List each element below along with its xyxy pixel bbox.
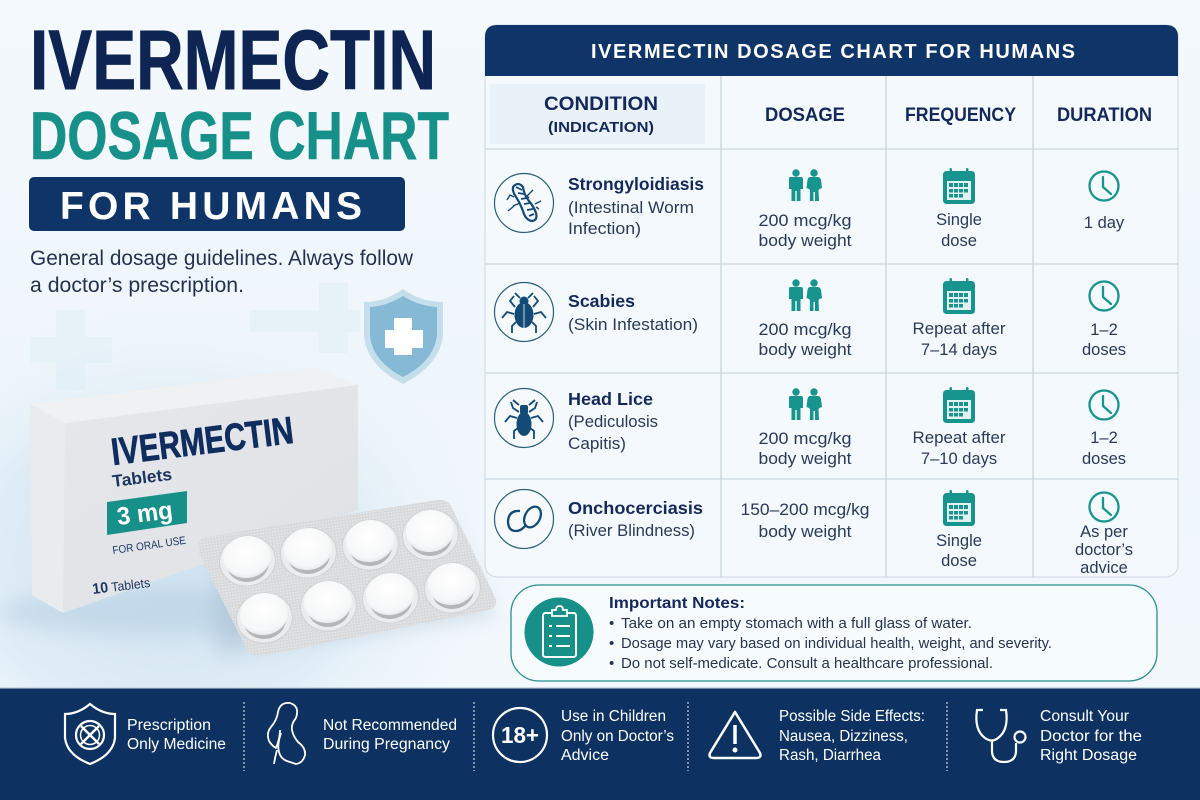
label: Nausea, Dizziness, [779,728,908,745]
condition note: Infection) [568,219,641,238]
frequency [936,490,982,570]
condition note: (Pediculosis [568,412,658,431]
dosage [758,388,852,468]
label [561,708,674,764]
duration [1082,282,1126,359]
label [127,717,226,753]
table header: condition [544,94,658,136]
notes list: • [609,635,614,652]
duration: doctor’s [1075,541,1133,559]
duration: As per [1080,523,1128,541]
duration: advice [1080,559,1128,577]
row: head lice [494,387,1126,468]
footer item: side effects [710,708,925,764]
frequency: dose [941,552,977,570]
label: Only on Doctor’s [561,728,674,745]
title banner: For Humans: FOR HUMANS [60,185,362,228]
duration: 1–2 [1090,321,1118,339]
icon: mite [494,282,554,342]
table header: condition: (INDICATION) [548,120,654,136]
duration: 1 day [1084,214,1125,232]
dosage: 200 mcg/kg [758,211,852,230]
notes list: Do not self-medicate. Consult a healthcare professional. [621,655,993,672]
label: Advice [561,747,609,764]
frequency: 7–10 days [921,450,997,468]
box label: 3 mg [107,491,187,535]
icon: pregnant woman [268,703,305,764]
dosage: 200 mcg/kg [758,429,852,448]
icon: worm [494,174,554,232]
notes heading: Important Notes: [609,595,745,612]
title: Dosage Chart: DOSAGE CHART [30,98,449,174]
label: Rash, Diarrhea [779,747,881,764]
label: During Pregnancy [323,736,450,753]
dosage: 200 mcg/kg [758,320,852,339]
duration [1082,390,1126,468]
icon: medical shield [364,289,443,384]
label: Right Dosage [1040,747,1137,764]
label: Consult Your [1040,708,1129,725]
condition note: (Intestinal Worm [568,198,694,217]
title banner: For Humans [29,177,405,231]
condition note: (River Blindness) [568,521,695,540]
condition name: Head Lice [568,389,653,409]
title block [29,13,449,231]
footer item: children [493,708,674,764]
frequency: dose [941,232,977,250]
frequency: Single [936,532,982,550]
dosage: 150–200 mcg/kg [740,500,870,519]
icon: 18 plus [493,708,547,762]
condition note: (Skin Infestation) [568,315,698,334]
notes list: Take on an empty stomach with a full glass of water. [621,615,972,632]
footer band [0,687,1200,800]
duration: 1–2 [1090,429,1118,447]
dosage: body weight [758,340,852,359]
icon: stethoscope [976,710,1026,762]
duration: doses [1082,450,1126,468]
label: Only Medicine [127,736,226,753]
footer item: pregnancy [268,703,457,764]
notes list: • [609,655,614,672]
notes list [609,615,1052,672]
medicine box [0,368,358,636]
dosage [758,279,852,359]
frequency: 7–14 days [921,341,997,359]
label: Use in Children [561,708,666,725]
row: strongyloidiasis [494,168,1125,250]
table header: condition: CONDITION [544,94,658,115]
icon: river worm loop [494,490,554,548]
blister pack [198,500,496,656]
box label: 10 tablets: 10 Tablets [91,574,152,598]
table banner: IVERMECTIN DOSAGE CHART FOR HUMANS [591,41,1075,63]
table banner [485,25,1178,76]
tablets [216,506,484,647]
row: scabies [494,278,1126,359]
dosage [758,169,852,250]
icon: clipboard [524,598,594,666]
box label: Tablets: Tablets [111,465,173,491]
label [323,717,457,753]
frequency [912,278,1006,359]
condition note: Capitis) [568,434,626,453]
label: Not Recommended [323,717,457,734]
duration [1084,172,1125,232]
icon: 18 plus: 18+ [501,722,539,748]
dosage: body weight [758,231,852,250]
box label: Ivermectin: IVERMECTIN [109,410,296,474]
notes list: Dosage may vary based on individual health, weight, and severity. [621,635,1052,652]
frequency [912,387,1006,468]
label: Prescription [127,717,211,734]
icon: warning triangle [710,712,760,758]
notes list: • [609,615,614,632]
footer item: prescription only [65,704,226,764]
icon: louse [494,388,554,448]
condition note [568,412,658,453]
table header: frequency: FREQUENCY [905,105,1016,126]
footer item: consult doctor [976,708,1142,764]
subtitle: General dosage guidelines. Always follow [30,246,413,270]
dosage [740,500,870,541]
icon: shield prohibition [65,704,115,764]
table header: dosage: DOSAGE [765,105,845,126]
frequency: Repeat after [912,320,1006,338]
condition name: Onchocerciasis [568,498,703,518]
frequency: Single [936,211,982,229]
title: Ivermectin: IVERMECTIN [30,13,436,107]
frequency: Repeat after [912,429,1006,447]
condition name: Scabies [568,291,635,311]
panel: important notes [511,585,1157,681]
box label: 3 mg: 3 mg [115,496,174,531]
label: Possible Side Effects: [779,708,925,725]
condition note [568,198,694,238]
label [779,708,925,764]
dosage: body weight [758,522,852,541]
box label: for oral use: FOR ORAL USE [112,535,187,557]
dosage: body weight [758,449,852,468]
label [1040,708,1142,764]
label: Doctor for the [1040,728,1142,745]
subtitle: a doctor’s prescription. [30,273,244,297]
frequency [936,168,982,250]
subtitle [30,246,413,297]
condition name: Strongyloidiasis [568,174,704,194]
panel: dosage table [485,25,1178,577]
duration: doses [1082,341,1126,359]
duration [1075,492,1133,577]
table header: duration: DURATION [1057,105,1152,126]
row: onchocerciasis [494,490,1133,577]
